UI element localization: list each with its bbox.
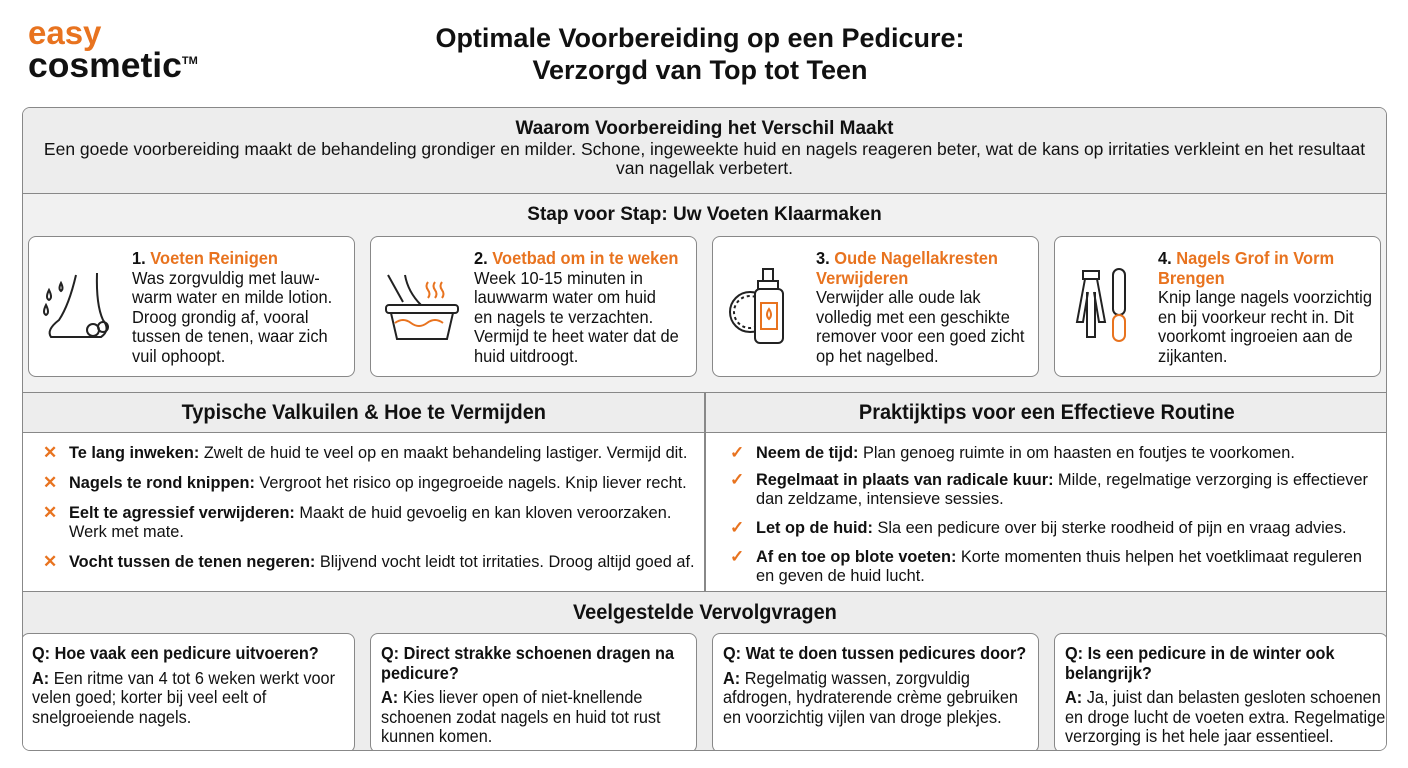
panel: pitfalls <box>43 443 695 571</box>
panel: tips: Neem de tijd: Plan genoeg ruimte in om haasten en foutjes te voorkomen. <box>756 443 1295 462</box>
panel: FAQ <box>23 591 1386 752</box>
panel: tips: dan zeldzame, intensieve sessies. <box>756 489 1004 508</box>
panel: tips: en geven de huid lucht. <box>756 566 925 585</box>
panel: pitfalls: Werk met mate. <box>69 522 184 541</box>
faq 3: afdrogen, hydraterende crème gebruiken <box>723 687 1018 707</box>
panel: steps <box>23 194 1386 393</box>
faq 4: Q: Is een pedicure in de winter ook <box>1065 643 1335 663</box>
step 1: Was zorgvuldig met lauw- <box>132 268 320 288</box>
faq 1: Q: Hoe vaak een pedicure uitvoeren? <box>32 643 319 663</box>
panel: pitfalls header: Praktijktips voor een Effectieve Routine <box>859 401 1234 424</box>
title: Optimale Voorbereiding op een Pedicure: <box>435 23 965 53</box>
faq 2: Q: Direct strakke schoenen dragen na <box>381 643 674 663</box>
step 2: en nagels te verzachten. <box>474 306 653 326</box>
panel: tips: Af en toe op blote voeten: Korte momenten thuis helpen het voetklimaat reguleren <box>756 547 1362 566</box>
faq 2: pedicure? <box>381 662 459 682</box>
logo: cosmeticTM <box>28 45 198 85</box>
faq 4 <box>1054 633 1388 753</box>
step 1: 1. Voeten Reinigen <box>132 248 278 268</box>
faq 4: A: Ja, juist dan belasten gesloten schoenen <box>1065 687 1381 707</box>
panel: tips: ✓ <box>730 547 744 566</box>
step 2: huid uitdroogt. <box>474 346 578 366</box>
faq 3: en voorzichtig vijlen van droge plekjes. <box>723 706 1002 726</box>
step 2 <box>370 236 697 377</box>
step 1 <box>28 236 355 377</box>
step 3: volledig met een geschikte <box>816 306 1010 326</box>
faq 2: kunnen komen. <box>381 726 492 746</box>
panel: why <box>23 108 1386 194</box>
panel: tips: ✓ <box>730 518 744 537</box>
faq 2 <box>370 633 697 753</box>
faq 3: Q: Wat te doen tussen pedicures door? <box>723 643 1026 663</box>
step 2: 2. Voetbad om in te weken <box>474 248 678 268</box>
panel: tips: Regelmaat in plaats van radicale kuur: Milde, regelmatige verzorging is effectiever <box>756 470 1368 489</box>
icon: foot bath <box>385 274 459 340</box>
step 4: zijkanten. <box>1158 346 1228 366</box>
panel: tips <box>730 443 1368 585</box>
panel: pitfalls: Eelt te agressief verwijderen: Maakt de huid gevoelig en kan kloven veroorzaken. <box>69 503 671 522</box>
step 3: op het nagelbed. <box>816 346 939 366</box>
logo: easy <box>28 14 101 51</box>
faq 3 <box>712 633 1039 753</box>
icon: clipper and file <box>1076 268 1126 342</box>
panel: why: Een goede voorbereiding maakt de behandeling grondiger en milder. Schone, ingeweekte huid en nagels reageren beter, wat de kans op irritaties verkleint en het resultaat <box>44 139 1365 159</box>
panel: pitfalls header <box>23 393 1386 433</box>
step 3 <box>712 236 1039 377</box>
panel: tips: Let op de huid: Sla een pedicure over bij sterke roodheid of pijn en vraag advies. <box>756 518 1347 537</box>
faq 4: en droge lucht de voeten extra. Regelmatige <box>1065 706 1385 726</box>
step 4: en bij voorkeur recht in. Dit <box>1158 306 1354 326</box>
faq 1 <box>21 633 355 753</box>
panel: why: van nagellak verbetert. <box>616 158 793 178</box>
faq 2: A: Kies liever open of niet-knellende <box>381 687 642 707</box>
step 4: Brengen <box>1158 268 1225 288</box>
faq 1: velen goed; korter bij veel eelt of <box>32 687 266 707</box>
icon: remover bottle <box>729 268 784 344</box>
step 4: Knip lange nagels voorzichtig <box>1158 287 1372 307</box>
panel: steps: Stap voor Stap: Uw Voeten Klaarmaken <box>527 204 882 225</box>
faq 3: A: Regelmatig wassen, zorgvuldig <box>723 668 970 688</box>
panel: FAQ: Veelgestelde Vervolgvragen <box>573 601 836 624</box>
panel: pitfalls: ✕ <box>43 503 57 522</box>
panel: tips: ✓ <box>730 470 744 489</box>
step 4 <box>1054 236 1381 377</box>
step 2: lauwwarm water om huid <box>474 287 656 307</box>
step 1: vuil ophoopt. <box>132 346 225 366</box>
step 4: 4. Nagels Grof in Vorm <box>1158 248 1334 268</box>
step 2: Week 10-15 minuten in <box>474 268 643 288</box>
panel: pitfalls: Te lang inweken: Zwelt de huid te veel op en maakt behandeling lastiger. Vermijd dit. <box>69 443 687 462</box>
panel: pitfalls: ✕ <box>43 443 57 462</box>
faq 2: schoenen zodat nagels en huid tot rust <box>381 706 661 726</box>
panel: pitfalls: ✕ <box>43 552 57 571</box>
step 3: remover voor een goed zicht <box>816 326 1024 346</box>
icon: foot <box>43 273 109 338</box>
divider <box>704 393 706 591</box>
step 2: Vermijd te heet water dat de <box>474 326 679 346</box>
title <box>435 23 965 85</box>
step 1: tussen de tenen, waar zich <box>132 326 328 346</box>
panel: tips: ✓ <box>730 443 744 462</box>
panel: pitfalls: ✕ <box>43 473 57 492</box>
panel: why: Waarom Voorbereiding het Verschil Maakt <box>516 118 894 139</box>
step 4: voorkomt ingroeien aan de <box>1158 326 1353 346</box>
step 3: Verwijderen <box>816 268 908 288</box>
logo <box>28 14 198 85</box>
faq 1: snelgroeiende nagels. <box>32 706 191 726</box>
faq 1: A: Een ritme van 4 tot 6 weken werkt voor <box>32 668 335 688</box>
faq 4: verzorging is het hele jaar essentieel. <box>1065 726 1334 746</box>
step 3: Verwijder alle oude lak <box>816 287 981 307</box>
panel: pitfalls: Vocht tussen de tenen negeren: Blijvend vocht leidt tot irritaties. Droog altijd goed af. <box>69 552 695 571</box>
panel: pitfalls: Nagels te rond knippen: Vergroot het risico op ingegroeide nagels. Knip liever recht. <box>69 473 687 492</box>
panel: pitfalls header: Typische Valkuilen & Hoe te Vermijden <box>182 401 546 424</box>
step 3: 3. Oude Nagellakresten <box>816 248 998 268</box>
faq 4: belangrijk? <box>1065 662 1152 682</box>
title: Verzorgd van Top tot Teen <box>532 55 868 85</box>
step 1: warm water en milde lotion. <box>132 287 332 307</box>
step 1: Droog grondig af, vooral <box>132 306 308 326</box>
